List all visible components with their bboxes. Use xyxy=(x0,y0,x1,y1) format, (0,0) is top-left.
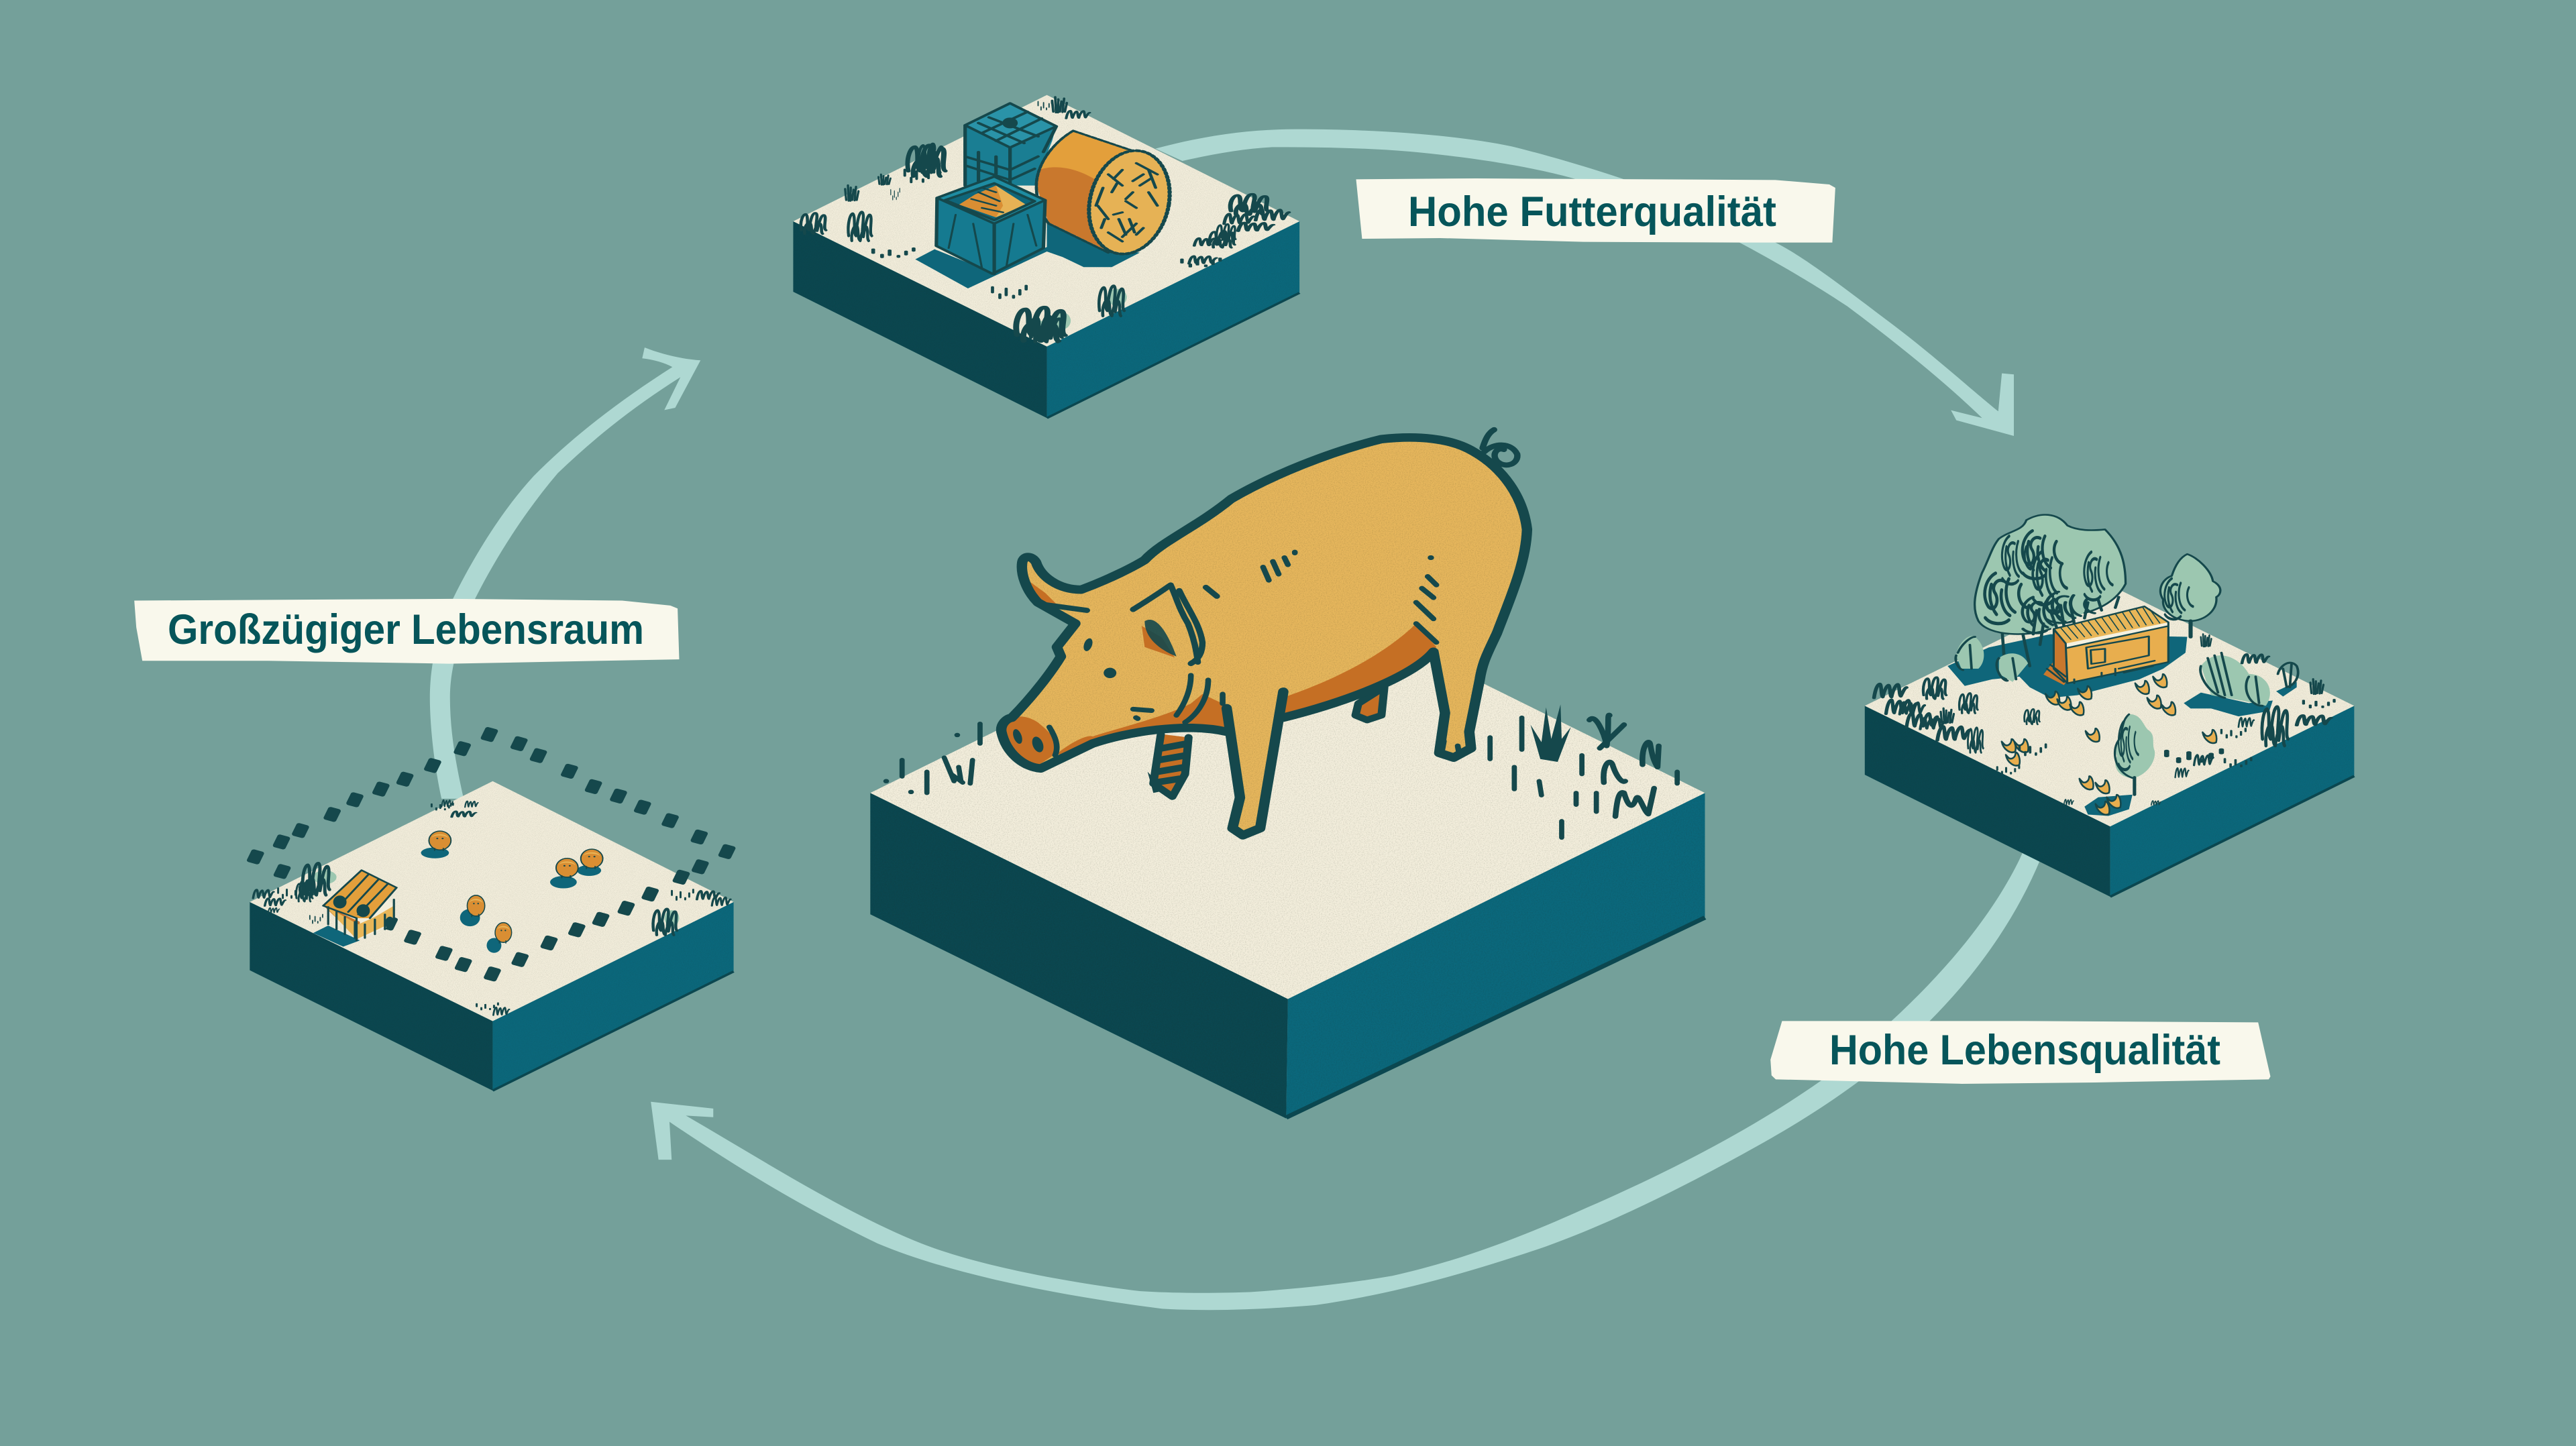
arrow: Lebensraum to Futterqualität xyxy=(430,347,700,799)
block edge xyxy=(492,971,734,1091)
panel: left block with fence, hut and pigs xyxy=(246,726,737,1091)
block edge xyxy=(1047,293,1299,418)
shadows xyxy=(915,223,1140,288)
panel: top block with feed xyxy=(793,95,1299,418)
icon: small tree right xyxy=(2161,554,2220,637)
block edge xyxy=(1286,917,1705,1117)
pig outline xyxy=(1002,437,1527,835)
jaw shading xyxy=(1058,694,1227,758)
grass left xyxy=(886,724,980,793)
eye xyxy=(1104,668,1116,678)
icon: hut xyxy=(313,871,396,947)
panel: right block with wagon, trees and chickens xyxy=(1865,514,2354,897)
icon: hay bale xyxy=(1036,131,1177,256)
tail xyxy=(1483,430,1517,465)
left face xyxy=(250,902,492,1091)
grass tufts xyxy=(253,800,731,1015)
label: Großzügiger Lebensraum: Großzügiger Lebensraum xyxy=(168,606,644,653)
pig body xyxy=(1002,437,1527,835)
label: Hohe Futterqualität: Hohe Futterqualität xyxy=(1408,188,1776,235)
icons: pigs xyxy=(421,831,603,953)
top plate xyxy=(870,587,1705,999)
left face xyxy=(793,221,1047,418)
right face xyxy=(492,902,734,1091)
top plate xyxy=(250,781,734,1021)
ear shading xyxy=(1029,581,1175,657)
top plate xyxy=(1865,585,2354,826)
grass right xyxy=(1490,704,1677,838)
arrow: Lebensqualität to Lebensraum xyxy=(651,846,2047,1310)
far front leg xyxy=(1148,734,1189,797)
block edge xyxy=(2110,776,2354,897)
right face xyxy=(1047,221,1299,418)
fence posts xyxy=(246,726,737,982)
snout xyxy=(1003,716,1057,766)
label: Hohe Futterqualität xyxy=(1356,178,1835,243)
icon: feed crate xyxy=(936,176,1045,274)
left face xyxy=(870,793,1288,1119)
grass tufts xyxy=(801,97,1289,342)
right face xyxy=(2110,706,2354,897)
icon: water tank xyxy=(965,103,1057,186)
far hind leg xyxy=(1356,687,1385,720)
icon: wagon xyxy=(2043,606,2168,685)
grass tufts xyxy=(1874,634,2334,805)
top plate xyxy=(793,95,1299,347)
icon: pig xyxy=(1002,430,1527,835)
icon: bushes xyxy=(1955,636,2298,706)
label: Großzügiger Lebensraum xyxy=(134,599,679,664)
icon: small tree front xyxy=(2115,714,2155,795)
tank cap xyxy=(1002,117,1018,128)
body details xyxy=(1049,552,1460,755)
icon: large trees xyxy=(1975,514,2126,679)
ear and head details xyxy=(1038,585,1217,663)
label: Hohe Lebensqualität xyxy=(1770,1021,2270,1084)
belly shading xyxy=(1283,624,1436,718)
shadows xyxy=(1947,634,2297,816)
panel: central block with pig xyxy=(870,430,1705,1119)
left face xyxy=(1865,706,2110,897)
right face xyxy=(1286,793,1705,1119)
far eye and nostrils xyxy=(1012,638,1094,753)
icons: chickens xyxy=(2002,674,2216,815)
arrow: Futterqualität to Lebensqualität xyxy=(1155,129,2014,436)
label: Hohe Lebensqualität: Hohe Lebensqualität xyxy=(1829,1027,2220,1074)
